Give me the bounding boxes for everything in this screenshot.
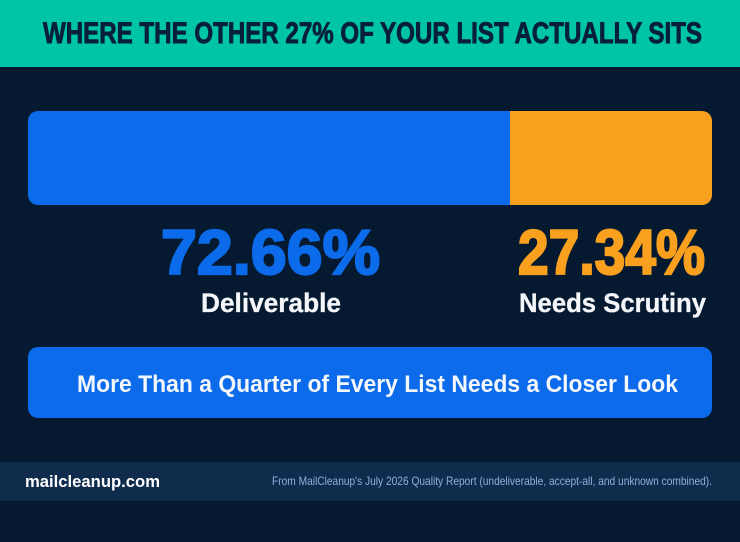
- footer band: [0, 462, 740, 501]
- bar segment: deliverable: [28, 111, 510, 205]
- bar segment: needs scrutiny: [510, 111, 712, 205]
- value: 72.66%: 72.66%: [161, 218, 380, 288]
- stat: needs scrutiny: [518, 218, 706, 318]
- label: Needs Scrutiny: Needs Scrutiny: [519, 288, 706, 318]
- value: 27.34%: 27.34%: [518, 218, 705, 288]
- brand: mailcleanup.com: [25, 472, 160, 491]
- callout: [28, 347, 712, 418]
- stacked bar chart: [28, 111, 712, 205]
- callout text: More Than a Quarter of Every List Needs a Closer Look: [77, 371, 679, 398]
- stat: deliverable: [161, 218, 380, 318]
- label: Deliverable: Deliverable: [201, 288, 341, 318]
- header banner: [0, 0, 740, 67]
